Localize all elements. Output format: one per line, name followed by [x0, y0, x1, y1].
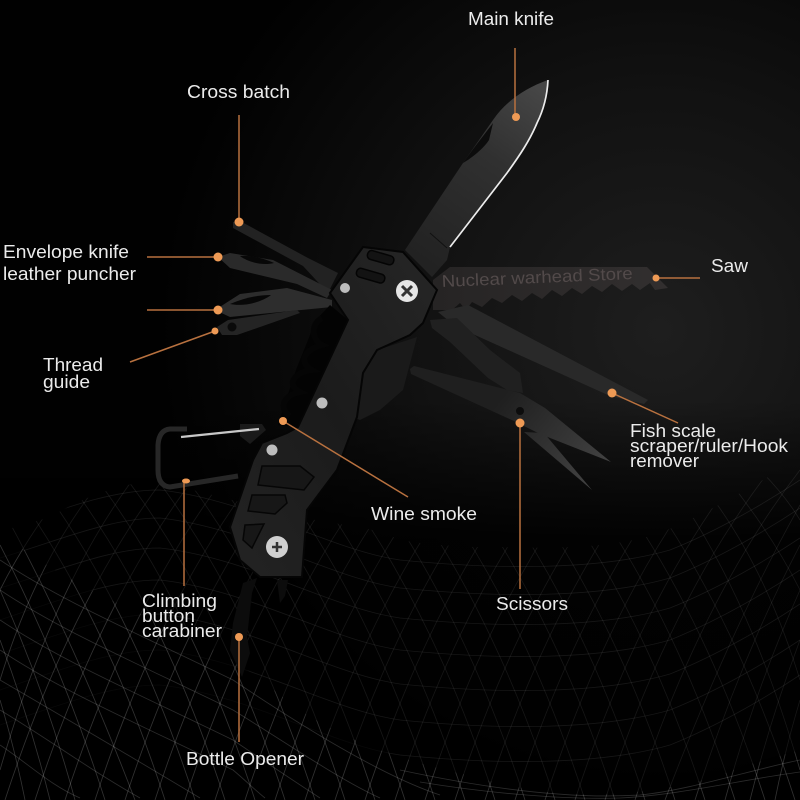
label: envelope knife and leather puncher	[3, 241, 136, 284]
label: cross batch: Cross batch	[187, 81, 290, 102]
screw: upper	[396, 280, 418, 302]
label: fish scale scraper: remover	[630, 450, 699, 471]
fish scale scraper	[438, 305, 648, 404]
bottle opener	[230, 578, 288, 677]
label: scissors: Scissors	[496, 593, 568, 614]
label: fish scale scraper: Fish scale	[630, 420, 716, 441]
background: faint rear wire mesh	[0, 450, 800, 800]
label: climbing button carabiner: Climbing	[142, 590, 217, 611]
carabiner	[158, 424, 266, 487]
label: main knife: Main knife	[468, 8, 554, 29]
label: envelope knife and leather puncher: Envelope knife	[3, 241, 129, 262]
leather puncher	[215, 288, 332, 317]
label: climbing button carabiner: button	[142, 605, 195, 626]
label: wine smoke: Wine smoke	[371, 503, 477, 524]
lower handle grips	[243, 466, 314, 548]
corkscrew in black gap	[278, 305, 348, 427]
saw blade	[433, 267, 668, 310]
callout dots	[182, 113, 660, 641]
multitool illustration	[158, 80, 668, 677]
label: envelope knife and leather puncher: leather puncher	[3, 263, 136, 284]
envelope knife	[218, 253, 332, 298]
thread guide	[217, 310, 300, 335]
cross batch screwdriver	[233, 221, 338, 293]
label: climbing button carabiner	[142, 590, 222, 641]
label: climbing button carabiner: carabiner	[142, 620, 222, 641]
label: thread guide: Thread	[43, 354, 103, 375]
label: thread guide	[43, 354, 103, 392]
saw store watermark: Nuclear warhead Store	[441, 264, 633, 291]
leader lines	[130, 48, 700, 742]
main knife blade	[405, 80, 548, 277]
label: bottle opener: Bottle Opener	[186, 748, 304, 769]
screw: lower	[266, 536, 288, 558]
rivets	[266, 283, 350, 456]
upper handle slots	[355, 250, 395, 284]
label: fish scale scraper: scraper/ruler/Hook	[630, 435, 789, 456]
scissors	[410, 366, 611, 490]
label: thread guide: guide	[43, 371, 90, 392]
label: saw: Saw	[711, 255, 749, 276]
lower background fade	[0, 400, 800, 800]
pliers piece	[430, 318, 523, 393]
label: fish scale scraper	[630, 420, 789, 471]
handle	[230, 247, 437, 577]
rear handle layer	[352, 337, 417, 420]
background: bright front wire mesh	[0, 545, 800, 800]
